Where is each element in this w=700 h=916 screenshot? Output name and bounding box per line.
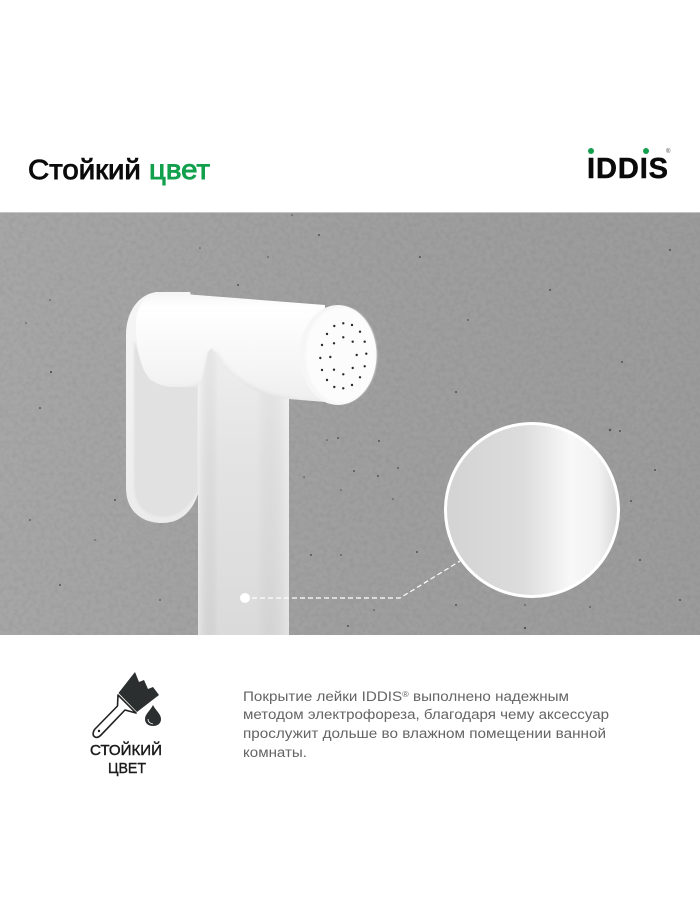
cylinder body	[136, 294, 325, 402]
wall specks	[25, 214, 681, 629]
shower head face	[300, 305, 376, 405]
description text: Покрытие лейки IDDIS	[243, 689, 384, 704]
spray holes	[319, 322, 367, 389]
description text: прослужит дольше во влажном помещении ванной	[243, 726, 606, 741]
back plate	[126, 292, 205, 523]
description text: комнаты.	[243, 745, 307, 760]
icon label: ЦВЕТ	[108, 761, 146, 777]
title: Стойкий цвет	[28, 154, 210, 185]
logo: IDDIS: IDDIS	[587, 153, 668, 185]
icon label: СТОЙКИЙ	[90, 741, 162, 759]
callout leader line	[240, 561, 460, 603]
callout: zoomed surface circle	[446, 424, 618, 596]
photo panel: concrete wall with hand shower	[0, 212, 700, 635]
logo: IDDIS: ®	[666, 148, 671, 155]
description text: ®	[402, 690, 409, 699]
icon label	[90, 741, 162, 777]
vertical pipe	[198, 340, 289, 635]
description text: методом электрофореза, благодаря чему аксессуар	[243, 707, 609, 722]
description text	[243, 689, 609, 760]
description text: выполнено надежным	[409, 689, 569, 704]
icon: paint brush with drop	[93, 672, 161, 737]
